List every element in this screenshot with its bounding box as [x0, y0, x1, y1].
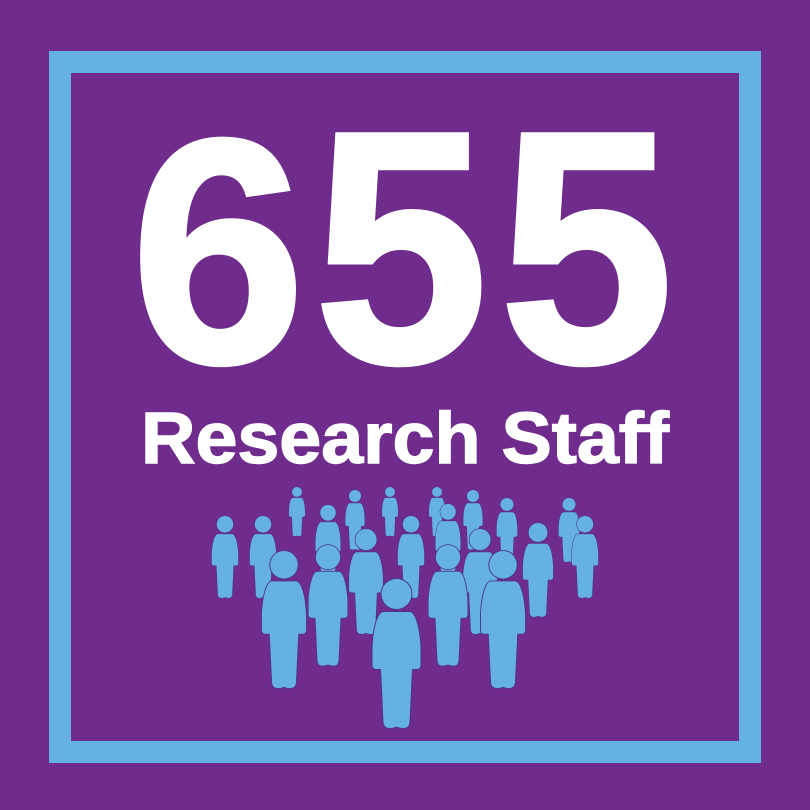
blue square frame	[60, 62, 750, 752]
headline number: 5	[499, 63, 674, 433]
headline number: 5	[314, 63, 488, 433]
headline number: 6	[131, 73, 305, 431]
headline number	[131, 63, 674, 433]
subtitle: Research Staff	[141, 399, 670, 479]
icon: crowd of people	[212, 487, 598, 728]
